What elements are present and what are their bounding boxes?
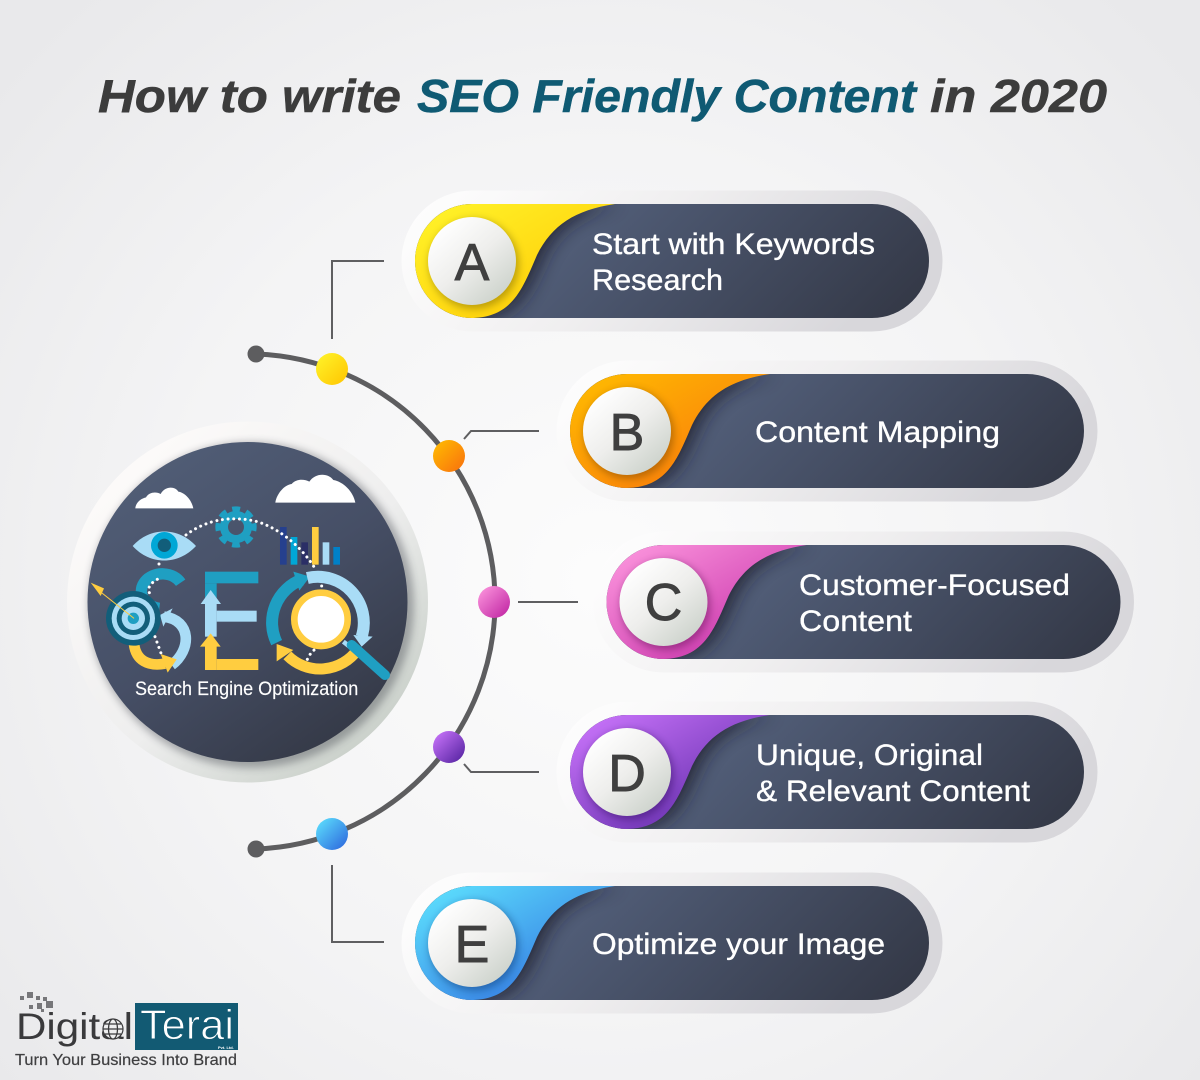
logo: Digital Terai: Pvt. Ltd. — [218, 1045, 234, 1050]
tagline: Search Engine Optimization — [135, 679, 358, 700]
target — [106, 591, 161, 646]
pill D: unique original relevant content: Unique, Original — [756, 739, 983, 772]
pill C: customer-focused content: Customer-Focused — [799, 569, 1070, 602]
timeline arc with nodes — [248, 346, 510, 858]
pill A: keywords research: Research — [592, 264, 723, 297]
gear — [218, 509, 254, 545]
pill D: unique original relevant content: D — [608, 745, 646, 803]
logo: Digital Terai — [15, 992, 238, 1069]
pill C: customer-focused content: Content — [799, 605, 913, 638]
logo pixel dots — [20, 992, 53, 1012]
letter E — [205, 572, 258, 583]
logo: Digital Terai: Turn Your Business Into Brand — [15, 1052, 237, 1069]
eye — [133, 531, 196, 560]
pill A: keywords research: A — [455, 234, 490, 292]
clouds — [135, 488, 193, 508]
SEO circle panel — [67, 422, 428, 782]
pill A: keywords research: Start with Keywords — [592, 228, 875, 261]
pill A: keywords research — [402, 190, 942, 332]
logo globe — [103, 1019, 123, 1039]
SEO illustration — [91, 475, 385, 700]
title: How to write — [98, 70, 401, 122]
pill E: optimize image — [402, 872, 942, 1014]
dotted path — [149, 519, 322, 659]
magnifier — [343, 642, 355, 651]
pill C: customer-focused content — [593, 532, 1134, 672]
title: in 2020 — [930, 70, 1107, 122]
pill B: content mapping: Content Mapping — [755, 416, 1000, 449]
pill B: content mapping: B — [610, 404, 644, 462]
title: SEO Friendly Content — [417, 70, 918, 122]
bars — [280, 527, 287, 565]
logo: Digital Terai: Terai — [140, 1001, 234, 1048]
pill B: content mapping — [556, 360, 1098, 502]
pill D: unique original relevant content: & Relevant Content — [756, 775, 1031, 808]
pill E: optimize image: E — [455, 916, 489, 974]
letter S — [141, 574, 181, 608]
logo: Digital Terai: Digital — [16, 1006, 133, 1047]
pill D: unique original relevant content — [556, 702, 1098, 842]
pill C: customer-focused content: C — [645, 574, 682, 632]
letter O — [272, 580, 302, 643]
connector lines — [332, 261, 578, 942]
title — [98, 70, 1107, 122]
pill E: optimize image: Optimize your Image — [592, 928, 885, 961]
